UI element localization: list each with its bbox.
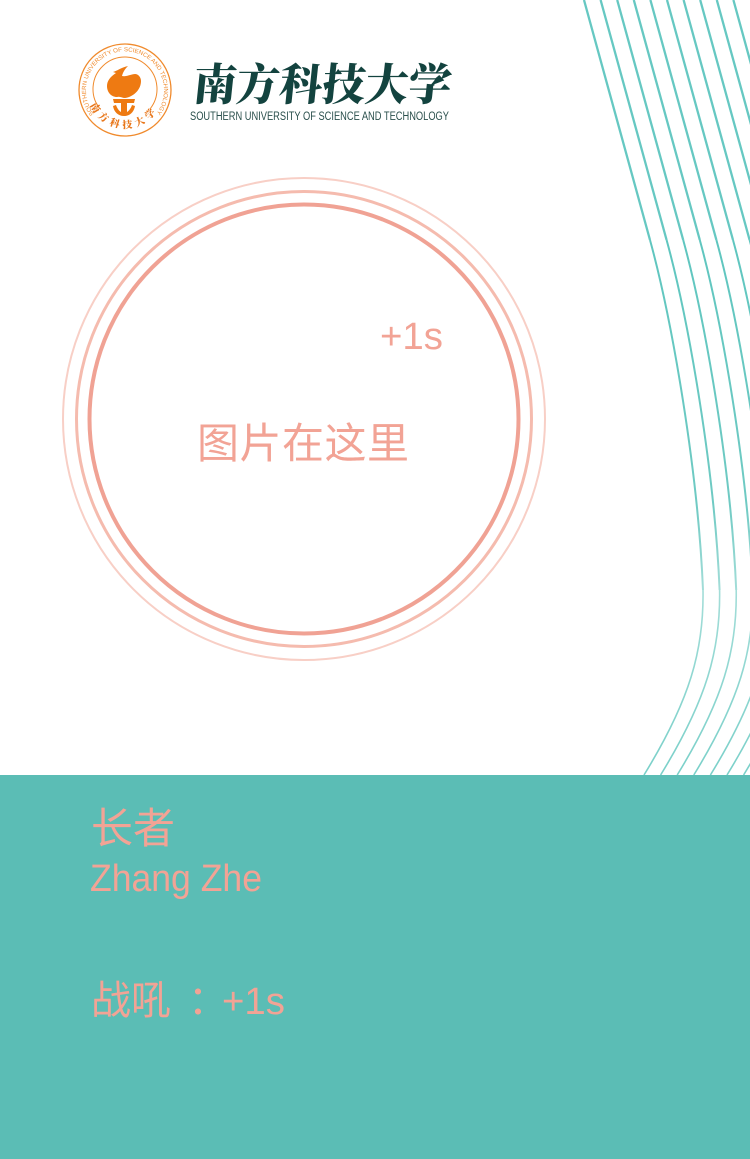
battle cry: +1s: [222, 981, 285, 1023]
+1s note: +1s: [380, 316, 443, 358]
seal: 南方科技大学: [90, 102, 154, 130]
battle cry: ：: [188, 979, 228, 1023]
seal torch: [113, 99, 135, 116]
seal: SOUTHERN UNIVERSITY OF SCIENCE AND TECHNOLOGY: [82, 47, 168, 116]
placeholder text: 图片在这里: [197, 420, 409, 467]
seal flame: [107, 66, 141, 98]
photo placeholder rings: [63, 178, 545, 660]
wordmark chinese: 南方科技大学: [191, 61, 454, 110]
seal chinese: [90, 105, 160, 128]
decorative curved lines: [584, 0, 750, 775]
name in pinyin: Zhang Zhe: [90, 858, 262, 900]
battle cry: 战吼: [91, 979, 171, 1023]
teal info panel: [0, 775, 750, 1159]
seal english: [86, 51, 164, 114]
seal: [78, 43, 172, 137]
battle cry: [91, 979, 285, 1023]
wordmark english: SOUTHERN UNIVERSITY OF SCIENCE AND TECHNOLOGY: [190, 111, 449, 123]
logo: university seal and wordmark: [78, 43, 454, 137]
name in Chinese: 长者: [91, 805, 175, 852]
